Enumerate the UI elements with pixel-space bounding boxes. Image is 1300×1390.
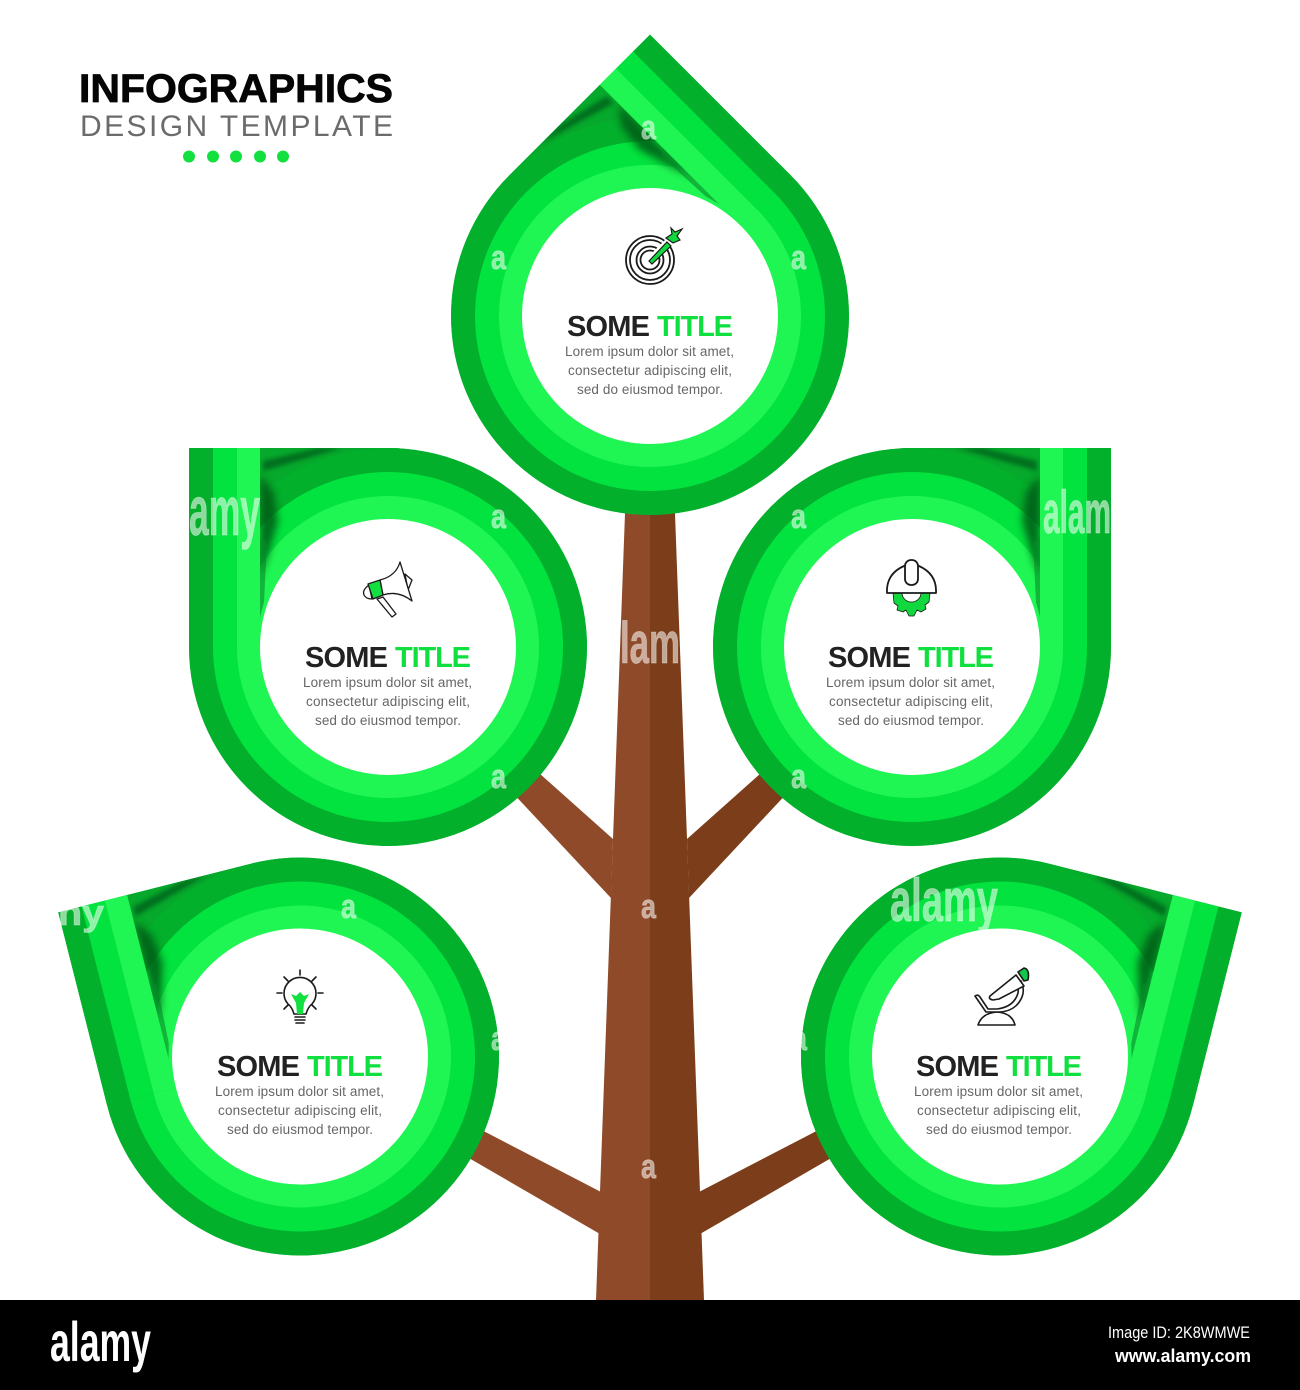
text: card body: consectetur adipiscing elit, [829, 694, 993, 709]
text: card body [303, 675, 472, 728]
text: card title: SOME [305, 642, 388, 674]
text: card title: TITLE [657, 311, 733, 343]
text: card title: TITLE [395, 642, 471, 674]
text: card body [826, 675, 995, 728]
leaf panel: bottom left [58, 815, 542, 1298]
leaf panel: bottom right [758, 815, 1242, 1298]
text: card body: sed do eiusmod tempor. [577, 382, 723, 397]
text: card body: Lorem ipsum dolor sit amet, [215, 1084, 384, 1099]
text: card body: consectetur adipiscing elit, [568, 363, 732, 378]
watermark: alamy [890, 867, 998, 934]
watermark: amy [189, 472, 260, 550]
text: card title: TITLE [307, 1051, 383, 1083]
subheading: DESIGN TEMPLATE [80, 110, 393, 143]
image id: Image ID: 2K8WMWE [1108, 1323, 1250, 1342]
dots [183, 150, 289, 162]
text: card body: Lorem ipsum dolor sit amet, [303, 675, 472, 690]
watermark: lam [620, 611, 680, 676]
right half of trunk [650, 500, 704, 1300]
watermark [58, 109, 1111, 1186]
lower right branch [697, 1124, 845, 1234]
upper left branch [510, 765, 613, 898]
watermark: a [641, 109, 657, 147]
text: card title: TITLE [1006, 1051, 1082, 1083]
tree trunk and branches [455, 500, 845, 1300]
watermark: a [791, 239, 807, 277]
watermark: a [491, 239, 507, 277]
watermark: a [791, 498, 807, 536]
lower left branch [455, 1124, 603, 1234]
text: card title: SOME [217, 1051, 300, 1083]
upper right branch [687, 765, 790, 898]
text: card body [215, 1084, 384, 1137]
text: card body [565, 344, 734, 397]
text: card body: consectetur adipiscing elit, [917, 1103, 1081, 1118]
heading: INFOGRAPHICS [79, 67, 393, 111]
text: card body: sed do eiusmod tempor. [838, 713, 984, 728]
text: card body: sed do eiusmod tempor. [227, 1122, 373, 1137]
watermark: a [341, 888, 357, 926]
watermark: a [641, 888, 657, 926]
text: card title: SOME [828, 642, 911, 674]
text: card body: sed do eiusmod tempor. [315, 713, 461, 728]
text: card body: Lorem ipsum dolor sit amet, [565, 344, 734, 359]
leaf panel: middle left [189, 448, 587, 846]
watermark: a [491, 758, 507, 796]
footer bar [0, 1300, 1300, 1390]
watermark: ny [58, 892, 104, 933]
icon: light bulb [277, 970, 323, 1023]
text: card body: sed do eiusmod tempor. [926, 1122, 1072, 1137]
watermark: a [792, 1020, 808, 1058]
icon: megaphone [364, 562, 412, 617]
text: card body: consectetur adipiscing elit, [306, 694, 470, 709]
watermark: a [491, 498, 507, 536]
footer logo: alamy [50, 1310, 151, 1373]
watermark: a [491, 1020, 507, 1058]
title block [79, 67, 393, 162]
text: card body: Lorem ipsum dolor sit amet, [826, 675, 995, 690]
leaf panel: top [369, 35, 931, 597]
text: card title: SOME [567, 311, 650, 343]
text: card body: Lorem ipsum dolor sit amet, [914, 1084, 1083, 1099]
leaf panel: middle right [713, 448, 1111, 846]
icon: microscope [975, 968, 1028, 1025]
text: card title: TITLE [918, 642, 994, 674]
icon: target [626, 228, 682, 284]
left half of trunk [596, 500, 650, 1300]
icon: helmet and gear [887, 560, 936, 616]
text: card body: consectetur adipiscing elit, [218, 1103, 382, 1118]
watermark: a [641, 1148, 657, 1186]
text: card body [914, 1084, 1083, 1137]
watermark: a [791, 758, 807, 796]
site url: www.alamy.com [1114, 1346, 1251, 1366]
text: alam [1043, 479, 1111, 546]
text: card title: SOME [916, 1051, 999, 1083]
